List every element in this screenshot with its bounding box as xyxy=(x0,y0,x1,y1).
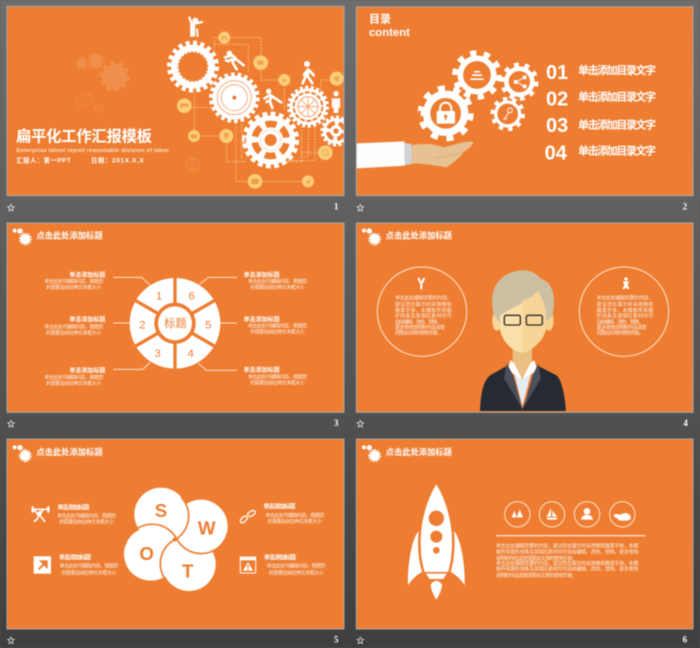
left body text: 自由编辑、改色、替换。 xyxy=(395,318,442,325)
left label S: 单击此处可编辑内容，根据您 xyxy=(57,513,116,520)
footer star xyxy=(357,637,364,644)
right label 2: 单击添加标题 xyxy=(244,316,280,324)
right label W: 的需要自由拉伸文本框大小 xyxy=(268,518,322,525)
glasses xyxy=(504,315,542,325)
left label 1: 单击此处可编辑内容，根据您 xyxy=(44,278,103,285)
slide title: 点击此处添加标题 xyxy=(386,447,453,457)
icon: jumping person xyxy=(189,18,202,37)
list item 04 xyxy=(545,142,656,164)
date: 日期：201X.X.X xyxy=(91,156,144,165)
icon: standing person xyxy=(333,91,339,113)
shirt xyxy=(513,370,532,407)
left label 1 xyxy=(44,271,105,291)
left label 1: 的需要自由拉伸文本框大小 xyxy=(46,284,101,291)
cover title: 扁平化工作汇报模板 xyxy=(16,127,153,145)
right label 2: 单击此处可编辑内容，根据您 xyxy=(248,322,307,329)
wheel numbers: 1 xyxy=(156,291,162,303)
SWOT letters xyxy=(139,500,216,582)
right label 3 xyxy=(244,366,307,386)
slide title: 点击此处添加标题 xyxy=(36,231,103,241)
wheel numbers: 3 xyxy=(155,348,161,360)
rocket xyxy=(408,484,465,600)
page number: 3 xyxy=(334,418,339,428)
dotted connector network xyxy=(192,38,337,181)
SWOT letters: T xyxy=(182,561,194,582)
list item 02 xyxy=(546,88,656,110)
left label O: 的需要自由拉伸文本框大小 xyxy=(62,569,116,576)
wheel numbers: 2 xyxy=(139,320,145,332)
right label W xyxy=(263,503,324,525)
footer star xyxy=(8,204,14,211)
lapels xyxy=(504,363,541,409)
icon: chain link xyxy=(239,510,256,524)
slide title: 点击此处添加标题 xyxy=(386,230,453,240)
SWOT letters: S xyxy=(155,500,167,521)
slide title: 点击此处添加标题 xyxy=(36,447,103,457)
gear: layers xyxy=(455,53,499,97)
gear: share xyxy=(502,65,536,99)
connector lines xyxy=(113,277,237,370)
footer star xyxy=(357,420,364,427)
paragraph: 说明和作品请查阅慧谷文库的使用手册。 xyxy=(496,572,577,579)
left label 3: 单击添加标题 xyxy=(69,367,105,375)
right label 1: 的需要自由拉伸文本框大小 xyxy=(250,284,305,291)
list item 01: 01 xyxy=(546,62,568,84)
logo gears xyxy=(13,228,31,244)
left label 2: 的需要自由拉伸文本框大小 xyxy=(46,329,101,336)
panel: slide 5 SWOT xyxy=(7,439,344,645)
right label 2: 的需要自由拉伸文本框大小 xyxy=(250,329,305,336)
right label W: 单击添加标题 xyxy=(263,503,295,511)
right body text: 单击此处编辑您要的内容， xyxy=(597,295,653,302)
left body text: 更多使用说明和作品请查 xyxy=(395,324,445,331)
logo gears xyxy=(13,445,31,461)
gear E clipped by slide edge xyxy=(322,117,350,145)
panel: slide 1 cover xyxy=(7,6,350,212)
page number: 5 xyxy=(334,635,339,645)
left label 2: 单击此处可编辑内容，根据您 xyxy=(44,323,103,330)
footer star xyxy=(8,420,14,427)
icon: runner top xyxy=(225,51,244,69)
left label 2 xyxy=(44,316,105,336)
person illustration xyxy=(480,270,566,411)
hand with sleeve xyxy=(357,141,473,168)
panel: slide 4 person and circles xyxy=(356,223,693,428)
right label 1: 单击添加标题 xyxy=(244,271,280,279)
right label T: 单击此处可编辑内容，根据您 xyxy=(267,563,326,570)
wheel numbers: 5 xyxy=(205,320,211,332)
face xyxy=(500,291,546,353)
list item 03: 03 xyxy=(546,115,568,137)
list item 01: 单击添加目录文字 xyxy=(578,63,656,77)
list item 03: 单击添加目录文字 xyxy=(578,117,656,131)
page number: 2 xyxy=(683,202,688,212)
list item 02: 单击添加目录文字 xyxy=(578,89,656,103)
left label S: 单击添加标题 xyxy=(57,503,89,511)
faded background decorations xyxy=(75,54,200,171)
page number: 4 xyxy=(683,418,688,428)
logo gears xyxy=(362,228,380,244)
divider xyxy=(496,535,645,536)
icon: arrow square xyxy=(34,556,51,574)
reporter: 汇报人：第一PPT xyxy=(16,156,71,165)
panel: slide 3 six-part wheel xyxy=(7,223,344,428)
yellow icon circles xyxy=(177,32,344,189)
wheel numbers: 6 xyxy=(189,291,195,303)
gear B xyxy=(211,74,258,121)
icon: weightlifter xyxy=(32,507,49,521)
logo gears xyxy=(362,445,380,461)
right circle with text xyxy=(579,267,669,356)
cover subtitle: Enterprise talent report reasonable division of labor xyxy=(16,148,170,154)
right label 1 xyxy=(244,271,307,291)
left label 3 xyxy=(44,367,105,387)
ears xyxy=(492,311,502,331)
panel: slide 6 rocket xyxy=(356,439,693,645)
left body text: 雅黑字体，本模板所有图 xyxy=(395,307,452,314)
left label 2: 单击添加标题 xyxy=(69,316,105,324)
left label O: 单击添加标题 xyxy=(59,554,91,562)
left label 3: 的需要自由拉伸文本框大小 xyxy=(46,380,101,387)
list item 04: 04 xyxy=(545,142,567,164)
right label 3: 的需要自由拉伸文本框大小 xyxy=(250,379,305,386)
list item 04: 单击添加目录文字 xyxy=(578,144,656,158)
wheel numbers xyxy=(139,291,211,360)
hair xyxy=(492,270,554,323)
left body text: 形线条及其相应素材均可 xyxy=(395,313,452,320)
right label T xyxy=(264,554,326,576)
gear: lock xyxy=(421,88,471,138)
right label T: 的需要自由拉伸文本框大小 xyxy=(269,569,324,576)
left body text: 建议您在展示时采用微软 xyxy=(395,301,452,308)
wheel xyxy=(130,276,220,371)
footer star xyxy=(357,204,364,211)
neck xyxy=(513,344,532,380)
paragraph: 说明和作品请查阅慧谷文库的使用手册。 xyxy=(496,555,577,562)
left label S xyxy=(57,503,116,525)
right body text: 形线条及其相应素材均可 xyxy=(597,313,653,320)
right body text: 建议您在展示时采用微软 xyxy=(597,301,653,308)
wheel numbers: 4 xyxy=(188,348,194,360)
right label 2 xyxy=(244,316,307,336)
icon: small figure xyxy=(623,277,629,289)
paragraph: 单击此处编辑您要的内容，建议您在展示时采用微软雅黑字体，本模 xyxy=(496,560,638,567)
gear: key xyxy=(492,99,523,129)
list item 01 xyxy=(546,62,656,84)
panel: slide 2 contents xyxy=(356,7,693,212)
icon: walking person xyxy=(303,61,314,83)
left label O: 单击此处可编辑内容，根据您 xyxy=(60,563,118,570)
right label 3: 单击添加标题 xyxy=(244,366,280,374)
list item 02: 02 xyxy=(546,88,568,110)
paragraph: 单击此处编辑您要的内容，建议您在展示时采用微软雅黑字体，本模 xyxy=(496,543,638,550)
icon: warning window xyxy=(240,557,256,573)
left label 1: 单击添加标题 xyxy=(69,271,105,279)
right label 3: 单击此处可编辑内容，根据您 xyxy=(248,373,307,380)
list item 03 xyxy=(546,115,656,137)
icon: fork xyxy=(418,278,424,289)
icon row xyxy=(505,502,635,527)
page number: 1 xyxy=(334,202,339,212)
left label S: 的需要自由拉伸文本框大小 xyxy=(59,518,114,525)
right body text: 阅慧谷文库的使用手册。 xyxy=(597,330,643,337)
right label 1: 单击此处可编辑内容，根据您 xyxy=(248,278,307,285)
left circle with text xyxy=(377,267,467,356)
left label O xyxy=(59,554,118,576)
right body text xyxy=(597,295,653,337)
gear A xyxy=(169,43,217,90)
paragraph: 板所有图形线条及其相应素材均可自由编辑、改色、替换。更多使用 xyxy=(496,566,638,573)
right body text: 更多使用说明和作品请查 xyxy=(597,324,647,331)
left label 3: 单击此处可编辑内容，根据您 xyxy=(44,374,103,381)
icon glyphs xyxy=(512,508,631,521)
left body text: 单击此处编辑您要的内容， xyxy=(395,295,452,302)
people icons xyxy=(189,18,339,113)
SWOT letters: W xyxy=(198,517,216,538)
icon: runner middle xyxy=(265,89,281,108)
SWOT pinwheel xyxy=(124,488,228,591)
gear D xyxy=(289,87,327,126)
left body text: 阅慧谷文库的使用手册。 xyxy=(395,330,442,337)
right label W: 单击此处可编辑内容，根据您 xyxy=(265,512,324,519)
SWOT letters: O xyxy=(139,543,154,564)
right label T: 单击添加标题 xyxy=(264,554,296,562)
gear C xyxy=(245,114,297,166)
contents heading: 目录 xyxy=(369,12,391,25)
paragraph xyxy=(496,543,638,579)
right body text: 自由编辑、改色、替换。 xyxy=(597,318,643,325)
suit xyxy=(480,366,566,411)
footer star xyxy=(8,637,14,644)
wheel centre label: 标题 xyxy=(164,317,187,330)
right body text: 雅黑字体，本模板所有图 xyxy=(597,307,653,314)
contents subheading: content xyxy=(369,27,410,39)
left body text xyxy=(395,295,452,337)
page number: 6 xyxy=(683,635,688,645)
paragraph: 板所有图形线条及其相应素材均可自由编辑、改色、替换。更多使用 xyxy=(496,548,638,555)
